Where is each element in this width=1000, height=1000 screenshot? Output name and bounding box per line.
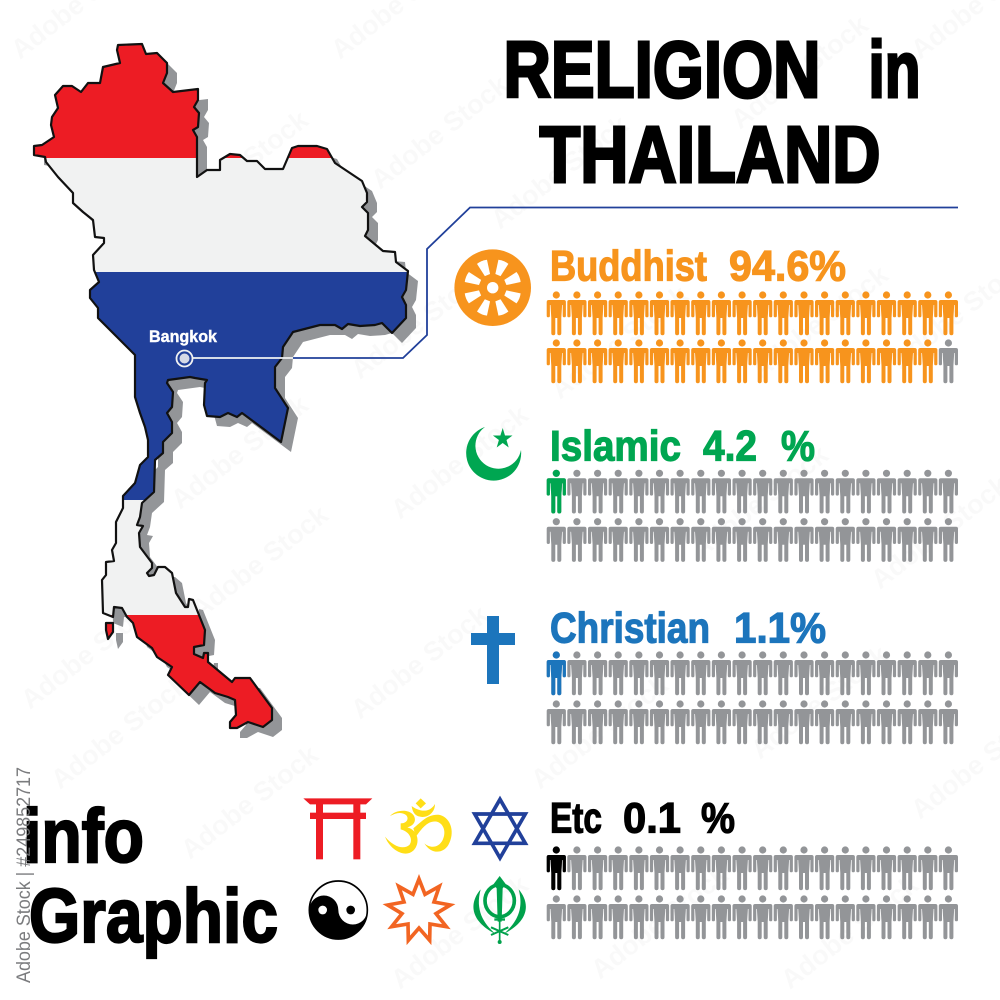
heading: Islamic 4.2 %: % — [781, 422, 815, 470]
people chart: Islamic — [547, 470, 958, 562]
heading: Etc 0.1 % — [550, 794, 735, 842]
icon: dharma wheel — [454, 249, 531, 326]
map outline — [34, 44, 408, 728]
people chart: Etc — [547, 846, 958, 939]
title — [504, 25, 920, 199]
panel: Buddhist — [454, 242, 958, 383]
heading: Buddhist 94.6%: Buddhist — [550, 242, 707, 290]
heading: Christian 1.1%: 1.1% — [734, 604, 826, 652]
other religion symbols — [303, 798, 526, 944]
icon: star of David — [475, 799, 525, 858]
heading: Islamic 4.2 %: Islamic — [550, 422, 681, 470]
heading: info Graphic: Graphic — [29, 874, 278, 959]
watermark: stock id: Adobe Stock | #249852717 — [13, 767, 35, 983]
heading: Etc 0.1 %: 0.1 — [623, 794, 681, 842]
panel: Christian — [471, 604, 958, 744]
map of Thailand with flag colours — [20, 30, 420, 740]
heading: Etc 0.1 %: Etc — [550, 794, 602, 842]
icon: khanda — [473, 876, 526, 944]
icon: om — [385, 798, 452, 854]
panel: Etc — [547, 794, 958, 939]
heading: Etc 0.1 %: % — [701, 794, 735, 842]
title: in — [868, 25, 920, 114]
heading: Islamic 4.2 % — [550, 422, 815, 470]
flag bands inside map — [34, 45, 407, 727]
icon: nine-pointed star — [388, 879, 450, 940]
icon: yin yang — [309, 881, 367, 939]
heading: Christian 1.1%: Christian — [550, 604, 710, 652]
icon: crescent and star — [466, 427, 521, 481]
heading: Islamic 4.2 %: 4.2 — [703, 422, 757, 470]
icon: torii gate — [303, 798, 372, 859]
map shadow — [44, 54, 418, 738]
Bangkok marker and label: Bangkok — [149, 327, 218, 346]
heading: Buddhist 94.6%: 94.6% — [729, 242, 846, 290]
title: THAILAND — [540, 110, 880, 199]
connector line from Bangkok to the panel — [192, 208, 958, 358]
people chart: Christian — [547, 651, 958, 744]
panel: Islamic — [466, 422, 958, 562]
title: RELIGION — [504, 25, 820, 114]
heading: info Graphic: info — [23, 794, 144, 879]
heading: Buddhist 94.6% — [550, 242, 846, 290]
people chart: Buddhist — [547, 291, 958, 383]
icon: cross — [471, 616, 515, 684]
heading: info Graphic — [23, 794, 278, 959]
heading: Christian 1.1% — [550, 604, 826, 652]
Bangkok marker and label — [149, 327, 218, 366]
